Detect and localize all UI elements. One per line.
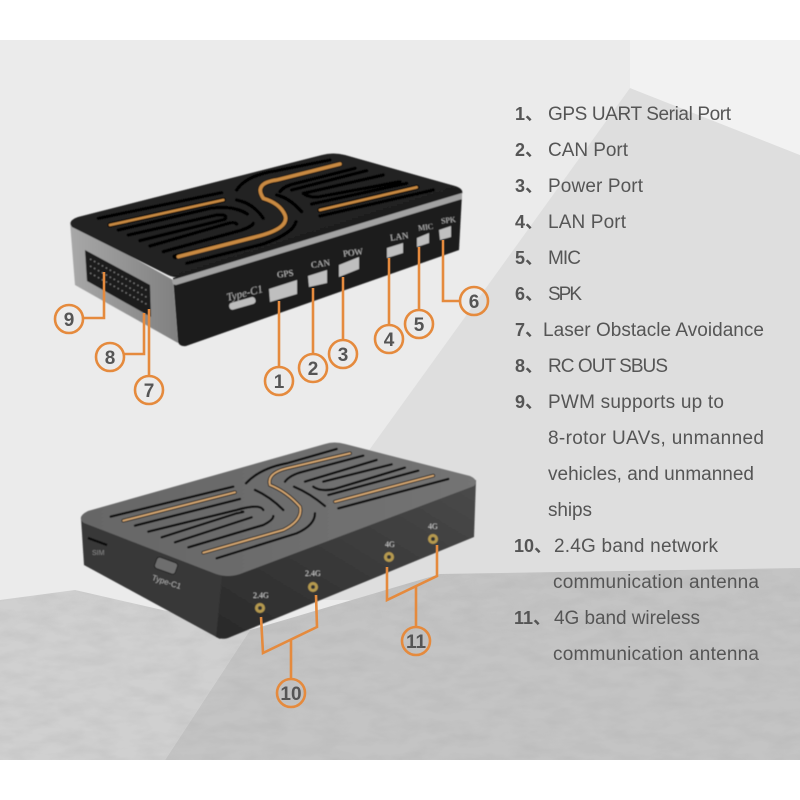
legend item 11: communication antenna [553, 644, 759, 665]
port: LAN: LAN [389, 230, 410, 243]
marker 6 [443, 240, 488, 315]
marker 7: 7 [144, 381, 154, 402]
marker 3 [329, 277, 357, 368]
legend item 7: Laser Obstacle Avoidance [543, 320, 764, 341]
device front face [216, 480, 476, 639]
port: LAN [387, 230, 410, 258]
marker 11: 11 [406, 632, 426, 653]
marker 6: 6 [469, 292, 479, 313]
legend item 9: vehicles, and unmanned [548, 464, 754, 485]
port: Type-C: Type-C1 [151, 573, 183, 591]
legend item 8: 8、 [515, 356, 543, 376]
antenna: 2.4G left: 2.4G [253, 591, 269, 600]
legend item 8: RC OUT SBUS [548, 356, 668, 377]
marker 11 [387, 545, 437, 655]
marker 2: 2 [308, 359, 318, 380]
marker 3: 3 [338, 345, 348, 366]
legend item 3: 3、 [515, 176, 543, 196]
port: SD slot: SIM [92, 550, 105, 557]
port: GPS [269, 268, 297, 302]
device top face [81, 442, 476, 576]
port: GPS: GPS [276, 268, 294, 280]
legend item 5: 5、 [515, 248, 543, 268]
legend item 11: 4G band wireless [554, 608, 700, 629]
marker 5: 5 [414, 315, 425, 336]
port: Type-C [151, 556, 183, 591]
port: CAN: CAN [310, 257, 331, 270]
legend item 6: 6、 [515, 284, 543, 304]
legend item 6: SPK [548, 284, 582, 305]
legend item 5 [515, 248, 581, 269]
marker 10: 10 [280, 684, 302, 705]
antenna: 2.4G left [253, 591, 269, 613]
device: bottom view with antennas [81, 442, 476, 639]
legend item 4: LAN Port [548, 212, 627, 233]
legend item 7: 7、 [515, 320, 543, 340]
legend item 5: MIC [548, 248, 581, 269]
callouts: numbered markers [55, 240, 488, 707]
port: CAN [308, 257, 331, 287]
legend item 11 [514, 608, 759, 665]
marker 7 [135, 309, 163, 404]
port: MIC [417, 222, 434, 247]
legend item 9: 9、 [515, 392, 543, 412]
antenna: 2.4G right [305, 569, 321, 592]
device left face [81, 518, 225, 639]
device: top view with side ports [70, 154, 462, 346]
legend item 3: Power Port [548, 176, 644, 197]
legend item 1: 1、 [515, 104, 543, 124]
marker 4: 4 [384, 330, 395, 351]
device top face [70, 154, 462, 277]
port: Type-C: Type-C1 [225, 283, 264, 304]
legend item 10: 2.4G band network [554, 536, 718, 557]
marker 4 [375, 258, 403, 353]
legend item 9: 8-rotor UAVs, unmanned [548, 428, 764, 449]
legend item 1: GPS UART Serial Port [548, 104, 732, 125]
legend item 2: CAN Port [548, 140, 629, 161]
marker 9: 9 [64, 310, 74, 331]
marker 2 [299, 288, 327, 382]
device front face [173, 194, 462, 346]
legend item 10: 10、 [514, 536, 552, 556]
antenna: 2.4G right: 2.4G [305, 569, 321, 578]
port: POW [339, 246, 364, 277]
marker 1 [265, 301, 293, 395]
legend item 10 [514, 536, 759, 593]
legend text list [514, 104, 764, 665]
antenna: 4G left: 4G [385, 540, 395, 549]
marker 9 [55, 272, 104, 333]
device metal side with pin header [70, 222, 178, 343]
legend item 10: communication antenna [553, 572, 759, 593]
vent slots [111, 449, 448, 558]
device metal rim [172, 193, 462, 285]
marker 5 [405, 247, 433, 338]
port: SPK: SPK [441, 215, 457, 226]
marker 10 [261, 595, 317, 707]
marker 1: 1 [274, 372, 285, 393]
port: SD slot [88, 538, 107, 557]
antenna: 4G right: 4G [428, 522, 438, 531]
vent slots [98, 160, 433, 263]
legend item 2: 2、 [515, 140, 543, 160]
port: POW: POW [342, 246, 364, 259]
legend item 9 [515, 392, 764, 521]
antenna: 4G left [384, 540, 395, 562]
legend item 6 [515, 284, 582, 305]
port: SPK [439, 215, 457, 240]
port: MIC: MIC [418, 222, 434, 233]
legend item 4 [515, 212, 627, 233]
legend item 9: PWM supports up to [548, 392, 724, 413]
marker 8: 8 [105, 348, 115, 369]
legend item 11: 11、 [514, 608, 551, 628]
legend item 9: ships [548, 500, 592, 521]
antenna: 4G right [428, 522, 438, 544]
legend item 4: 4、 [515, 212, 543, 232]
marker 8 [96, 313, 144, 371]
